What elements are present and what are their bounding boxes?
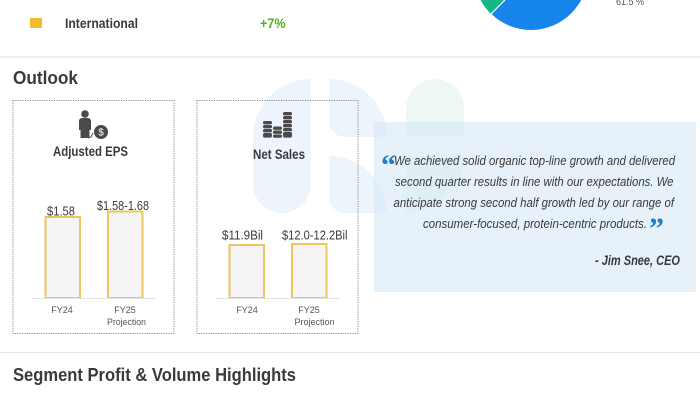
panel heading: Net Sales <box>253 147 305 162</box>
quote text <box>394 153 676 231</box>
pie chart fragment <box>474 0 644 30</box>
bar chart: Net Sales <box>216 228 348 328</box>
background logo watermark <box>253 79 464 213</box>
bar chart: EPS: $1.58-1.68 <box>97 199 149 213</box>
attribution: - Jim Snee, CEO <box>595 253 680 268</box>
icon: person with dollar coin: $ <box>98 128 104 138</box>
icon: person with dollar coin <box>79 110 108 139</box>
panel heading: Adjusted EPS <box>53 144 128 159</box>
bar chart: EPS: FY24 <box>51 305 73 315</box>
panel: Adjusted EPS <box>13 100 174 334</box>
heading: Outlook: Outlook <box>13 67 79 88</box>
panel: Net Sales <box>197 100 358 334</box>
bar chart: EPS <box>32 199 156 328</box>
icon: closing quote mark: ” <box>649 212 664 245</box>
quote text: consumer-focused, protein-centric products. <box>423 216 647 231</box>
bar chart: EPS: Projection <box>107 317 146 328</box>
legend row: International <box>30 15 286 31</box>
bar chart: Net Sales: $12.0-12.2Bil <box>282 228 348 242</box>
icon: coin stacks <box>263 112 292 138</box>
legend row: International: +7% <box>260 15 286 31</box>
bar chart: EPS: $1.58 <box>47 204 75 218</box>
bar chart: Net Sales: FY25 <box>298 305 320 315</box>
bar chart: Net Sales: $11.9Bil <box>222 228 263 242</box>
bar chart: EPS: FY25 <box>114 305 136 315</box>
legend row: International: International <box>65 16 138 31</box>
callout: CEO quote <box>374 122 696 292</box>
bar chart: Net Sales: Projection <box>294 317 334 328</box>
icon: opening quote mark: “ <box>381 149 396 182</box>
bar chart: Net Sales: FY24 <box>236 305 258 315</box>
heading: Segment Profit & Volume Highlights: Segment Profit & Volume Highlights <box>13 364 296 385</box>
